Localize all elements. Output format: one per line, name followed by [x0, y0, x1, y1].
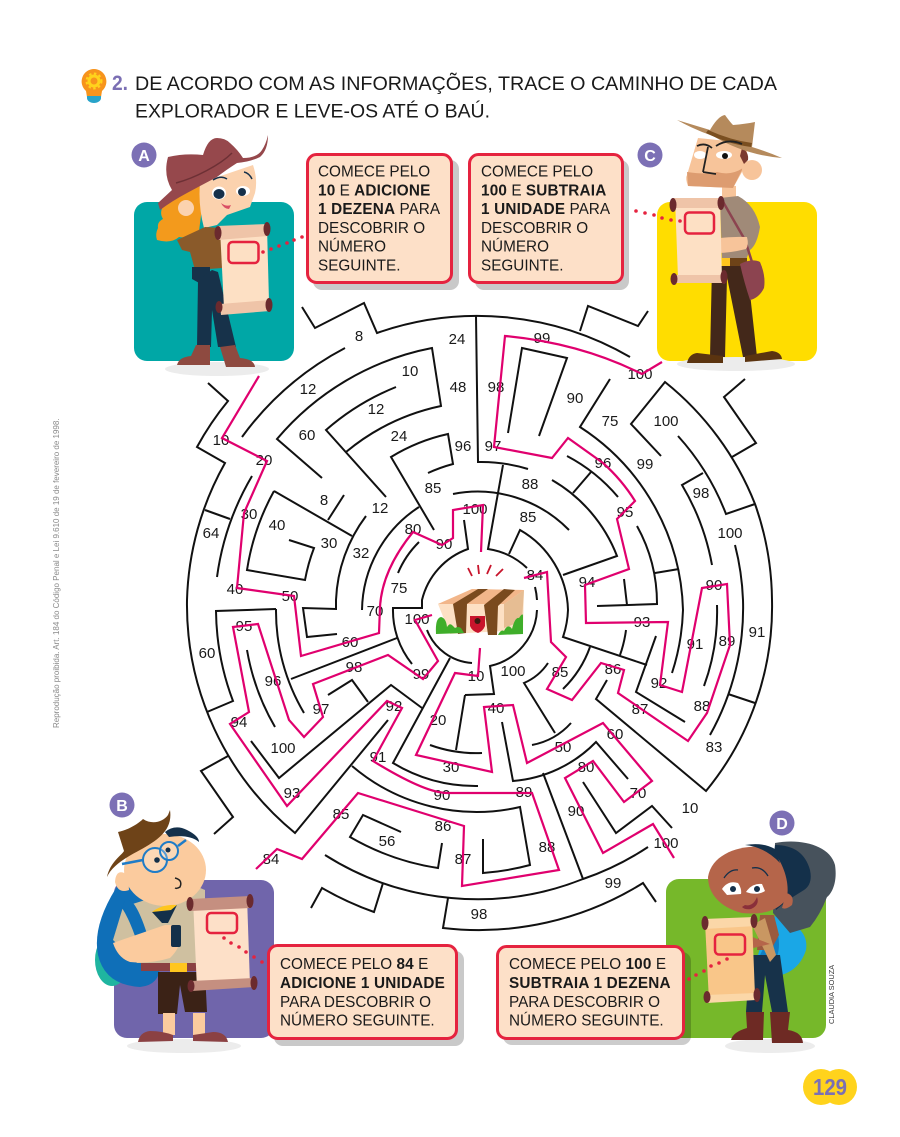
- path of explorer C: [494, 336, 730, 741]
- icon: light bulb: [82, 69, 106, 103]
- connector dots C: [625, 207, 682, 223]
- colour card D: [666, 879, 826, 1038]
- maze numbers: 96: [455, 438, 471, 455]
- maze numbers: 91: [687, 636, 703, 653]
- title: DE ACORDO COM AS INFORMAÇÕES, TRACE O CAMINHO DE CADA: [135, 71, 778, 95]
- maze numbers: 30: [443, 759, 459, 776]
- connector dots A: [261, 235, 304, 254]
- question number: 2.: [112, 72, 128, 95]
- maze numbers: 10: [682, 800, 698, 817]
- callout C: NÚMERO: [481, 238, 549, 256]
- callout C: [470, 154, 629, 290]
- maze numbers: 60: [299, 427, 315, 444]
- icon: treasure chest: [436, 565, 524, 635]
- callout B: ADICIONE 1 UNIDADE: [280, 975, 445, 992]
- maze numbers: 98: [693, 485, 709, 502]
- callout C: DESCOBRIR O: [481, 220, 588, 237]
- maze numbers: 95: [236, 618, 252, 635]
- maze numbers: 98: [471, 906, 487, 923]
- title: [135, 71, 778, 122]
- maze numbers: 90: [568, 803, 584, 820]
- maze numbers: 12: [368, 401, 384, 418]
- scroll C: [670, 196, 728, 285]
- path of explorer A: [222, 376, 483, 656]
- maze numbers: 70: [367, 603, 383, 620]
- maze walls: [187, 303, 772, 930]
- callout D: COMECE PELO 100 E: [509, 956, 666, 973]
- label badge B: B: [116, 798, 128, 815]
- callout B: [268, 946, 464, 1046]
- maze numbers: 48: [450, 379, 466, 396]
- maze numbers: 90: [706, 577, 722, 594]
- panel: explorer C: [470, 115, 817, 371]
- maze numbers: 20: [430, 712, 446, 729]
- maze numbers: [199, 328, 765, 923]
- maze numbers: 40: [269, 517, 285, 534]
- maze numbers: 100: [404, 611, 430, 628]
- maze numbers: 24: [391, 428, 407, 445]
- maze numbers: 100: [717, 525, 743, 542]
- copyright note: Reprodução proibida. Art. 184 do Código Penal e Lei 9.610 de 19 de fevereiro de 1998.: [52, 418, 61, 728]
- maze numbers: 94: [231, 714, 247, 731]
- scroll A: [214, 222, 272, 315]
- maze numbers: 100: [500, 663, 526, 680]
- floor shadow: [725, 1039, 815, 1053]
- maze numbers: 100: [462, 501, 488, 518]
- callout A: NÚMERO: [318, 238, 386, 256]
- maze numbers: 60: [342, 634, 358, 651]
- maze numbers: 84: [263, 851, 279, 868]
- maze numbers: 100: [653, 413, 679, 430]
- maze numbers: 90: [434, 787, 450, 804]
- floor shadow: [165, 362, 269, 376]
- callout A: DESCOBRIR O: [318, 220, 425, 237]
- maze numbers: 40: [227, 581, 243, 598]
- maze numbers: 56: [379, 833, 395, 850]
- panel: explorer D: [498, 810, 836, 1053]
- maze numbers: 93: [284, 785, 300, 802]
- label badge B: [110, 792, 134, 818]
- floor shadow: [677, 357, 795, 371]
- callout D: PARA DESCOBRIR O: [509, 994, 660, 1011]
- maze numbers: 20: [256, 452, 272, 469]
- maze numbers: 91: [749, 624, 765, 641]
- label badge D: D: [776, 816, 788, 833]
- maze numbers: 88: [694, 698, 710, 715]
- maze numbers: 100: [270, 740, 296, 757]
- callout A: COMECE PELO: [318, 164, 430, 180]
- maze numbers: 93: [634, 614, 650, 631]
- maze numbers: 90: [567, 390, 583, 407]
- maze numbers: 99: [637, 456, 653, 473]
- maze numbers: 85: [425, 480, 441, 497]
- maze numbers: 12: [300, 381, 316, 398]
- page number: [803, 1069, 857, 1105]
- callout B: COMECE PELO 84 E: [280, 956, 428, 973]
- maze numbers: 8: [320, 492, 328, 509]
- maze numbers: 10: [402, 363, 418, 380]
- callout D: SUBTRAIA 1 DEZENA: [509, 975, 671, 992]
- maze numbers: 96: [265, 673, 281, 690]
- label badge C: [638, 142, 662, 168]
- maze numbers: 94: [579, 574, 595, 591]
- panel: maze: [187, 303, 772, 930]
- page number: 129: [813, 1074, 847, 1100]
- scroll B: [186, 894, 258, 992]
- maze numbers: 8: [355, 328, 363, 345]
- label badge C: C: [644, 148, 656, 165]
- label badge A: A: [138, 148, 150, 165]
- callout B: NÚMERO SEGUINTE.: [280, 1012, 435, 1030]
- maze numbers: 99: [413, 666, 429, 683]
- title: EXPLORADOR E LEVE-OS ATÉ O BAÚ.: [135, 100, 490, 122]
- callout A: 1 DEZENA PARA: [318, 201, 441, 218]
- maze numbers: 64: [203, 525, 219, 542]
- maze numbers: 91: [370, 749, 386, 766]
- maze numbers: 100: [627, 366, 653, 383]
- figure C: [677, 115, 782, 363]
- maze numbers: 89: [516, 784, 532, 801]
- maze numbers: 30: [321, 535, 337, 552]
- callout A: [308, 154, 459, 290]
- maze numbers: 70: [630, 785, 646, 802]
- callout C: 1 UNIDADE PARA: [481, 201, 611, 218]
- maze numbers: 24: [449, 331, 465, 348]
- maze numbers: 75: [391, 580, 407, 597]
- maze numbers: 88: [539, 839, 555, 856]
- illustrator credit: CLAUDIA SOUZA: [827, 965, 836, 1024]
- maze numbers: 80: [578, 759, 594, 776]
- path of explorer B: [230, 615, 559, 886]
- colour card C: [657, 202, 817, 361]
- maze numbers: 100: [653, 835, 679, 852]
- maze numbers: 84: [527, 567, 543, 584]
- callout C: SEGUINTE.: [481, 257, 563, 274]
- maze numbers: 85: [333, 806, 349, 823]
- maze numbers: 50: [282, 588, 298, 605]
- maze numbers: 60: [199, 645, 215, 662]
- maze numbers: 85: [520, 509, 536, 526]
- figure D: [708, 841, 836, 1043]
- colour card A: [134, 202, 294, 361]
- callout A: SEGUINTE.: [318, 257, 400, 274]
- path of explorer D: [416, 648, 674, 858]
- maze numbers: 97: [485, 438, 501, 455]
- maze numbers: 98: [488, 379, 504, 396]
- maze numbers: 83: [706, 739, 722, 756]
- maze numbers: 99: [534, 330, 550, 347]
- maze numbers: 96: [595, 455, 611, 472]
- maze numbers: 10: [468, 668, 484, 685]
- panel: explorer B: [95, 792, 464, 1053]
- maze numbers: 92: [651, 675, 667, 692]
- connector dots B: [222, 936, 264, 964]
- label badge D: [770, 810, 794, 836]
- connector dots D: [687, 957, 729, 981]
- maze numbers: 40: [488, 700, 504, 717]
- maze numbers: 32: [353, 545, 369, 562]
- callout C: 100 E SUBTRAIA: [481, 182, 606, 199]
- maze numbers: 50: [555, 739, 571, 756]
- scroll D: [702, 914, 760, 1003]
- floor shadow: [127, 1039, 241, 1053]
- maze numbers: 75: [602, 413, 618, 430]
- callout B: PARA DESCOBRIR O: [280, 994, 431, 1011]
- maze numbers: 10: [213, 432, 229, 449]
- maze numbers: 95: [617, 504, 633, 521]
- maze numbers: 92: [386, 698, 402, 715]
- maze numbers: 97: [313, 701, 329, 718]
- panel: explorer A: [132, 135, 459, 376]
- callout D: NÚMERO SEGUINTE.: [509, 1012, 664, 1030]
- maze numbers: 86: [435, 818, 451, 835]
- maze numbers: 30: [241, 506, 257, 523]
- maze numbers: 90: [436, 536, 452, 553]
- maze numbers: 98: [346, 659, 362, 676]
- callout D: [498, 946, 691, 1045]
- maze numbers: 12: [372, 500, 388, 517]
- maze numbers: 60: [607, 726, 623, 743]
- maze numbers: 87: [455, 851, 471, 868]
- maze numbers: 99: [605, 875, 621, 892]
- callout A: 10 E ADICIONE: [318, 182, 431, 199]
- figure A: [156, 135, 268, 367]
- maze numbers: 80: [405, 521, 421, 538]
- maze numbers: 87: [632, 701, 648, 718]
- figure B: [95, 810, 228, 1042]
- callout C: COMECE PELO: [481, 164, 593, 180]
- maze numbers: 86: [605, 661, 621, 678]
- label badge A: [132, 142, 156, 168]
- maze numbers: 89: [719, 633, 735, 650]
- colour card B: [114, 880, 274, 1038]
- maze numbers: 88: [522, 476, 538, 493]
- maze numbers: 85: [552, 664, 568, 681]
